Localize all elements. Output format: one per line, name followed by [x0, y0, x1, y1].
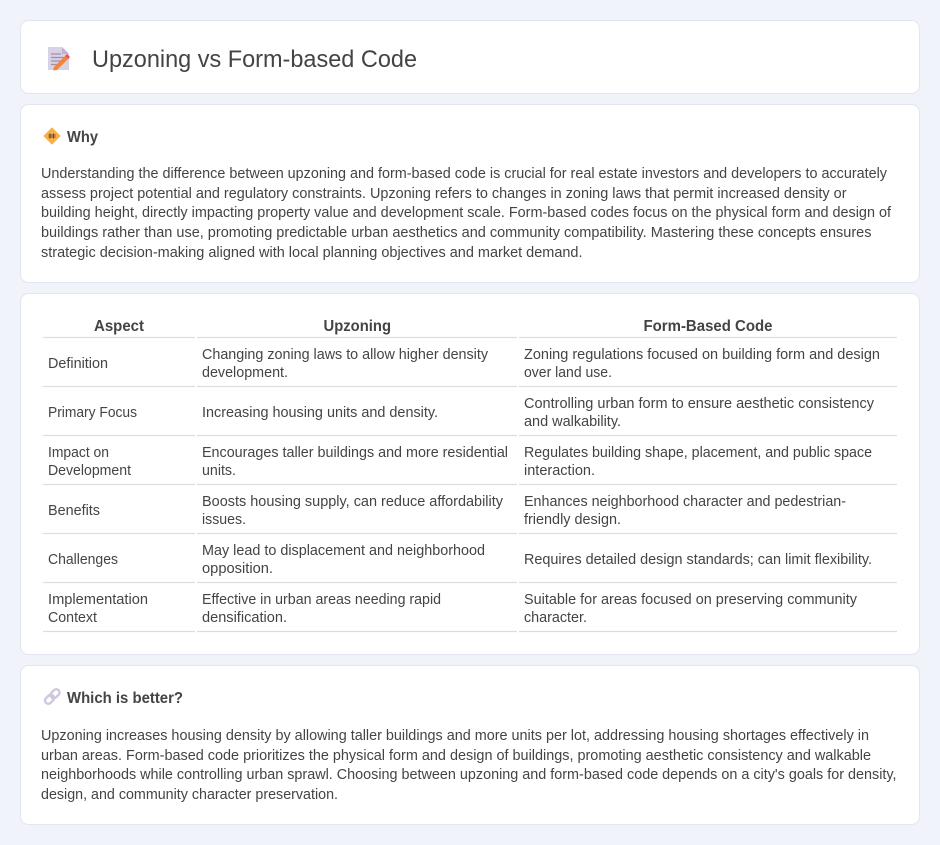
title: Upzoning vs Form-based Code	[92, 46, 417, 73]
heading: which is better: Which is better?	[67, 690, 183, 707]
row: implementation context: densification.	[202, 610, 287, 626]
row: primary focus: and walkability.	[524, 414, 621, 430]
table header row: Form-Based Code	[644, 318, 773, 335]
row: definition: over land use.	[524, 365, 612, 381]
row: challenges: Requires detailed design standards; can limit flexibility.	[524, 552, 872, 568]
text block: why paragraph	[41, 166, 892, 261]
text block: which is better paragraph: design, and community character preservation.	[41, 787, 338, 803]
text block: why paragraph: assess project potential and regulatory constraints. Upzoning refers to changes in zoning laws that permit increased density or	[41, 186, 847, 202]
row: impact on development: Encourages taller buildings and more residential	[202, 445, 508, 461]
row: challenges: May lead to displacement and neighborhood	[202, 543, 485, 559]
row: benefits: Boosts housing supply, can reduce affordability	[202, 494, 504, 510]
row: implementation context: Implementation	[48, 592, 148, 608]
text block: why paragraph: strategic decision-making aligned with local planning objectives and market demand.	[41, 245, 582, 261]
row: benefits: friendly design.	[524, 512, 621, 528]
row: benefits: Benefits	[48, 503, 100, 519]
text block: which is better paragraph	[41, 728, 896, 803]
row: implementation context: Context	[48, 610, 97, 626]
table header row: Aspect	[94, 318, 145, 335]
row: implementation context: Effective in urban areas needing rapid	[202, 592, 441, 608]
row: implementation context: character.	[524, 610, 587, 626]
row: definition: Changing zoning laws to allow higher density	[202, 347, 489, 363]
row: primary focus	[43, 396, 897, 436]
row: definition	[43, 347, 897, 386]
text block: why paragraph: Understanding the difference between upzoning and form-based code is crucial for real estate investors and developers to accurately	[41, 166, 888, 182]
row: implementation context	[43, 592, 897, 632]
icon: memo document with pencil	[48, 47, 70, 70]
icon: link chain	[44, 688, 61, 705]
row: challenges: opposition.	[202, 561, 273, 577]
panel: why	[20, 104, 920, 282]
row: definition: Zoning regulations focused on building form and design	[524, 347, 880, 363]
text block: why paragraph: building height, directly impacting property value and development scale. Form-based codes focus on the physical form and design of	[41, 205, 892, 221]
row: impact on development: Impact on	[48, 445, 109, 461]
panel: which is better	[20, 666, 920, 824]
row: impact on development: interaction.	[524, 463, 595, 479]
row: implementation context: Suitable for areas focused on preserving community	[524, 592, 858, 608]
row: primary focus: Increasing housing units and density.	[202, 405, 438, 421]
table header row	[43, 318, 897, 338]
row: impact on development: Development	[48, 463, 131, 479]
text block: which is better paragraph: neighborhoods while controlling urban sprawl. Choosing between upzoning and form-based code depends on a city's goals for density,	[41, 767, 896, 783]
panel: comparison table	[20, 294, 920, 654]
icon: orange diamond sign	[44, 128, 60, 144]
heading: why: Why	[67, 129, 98, 146]
row: definition: Definition	[48, 356, 108, 372]
row: challenges	[43, 543, 897, 582]
table header row: Upzoning	[324, 318, 391, 335]
text block: which is better paragraph: Upzoning increases housing density by allowing taller buildings and more units per lot, addressing housing shortages effectively in	[41, 728, 869, 744]
text block: why paragraph: buildings rather than use, promoting predictable urban aesthetics and community compatibility. Mastering these concepts ensures	[41, 225, 871, 241]
row: benefits: Enhances neighborhood character and pedestrian-	[524, 494, 846, 510]
row: primary focus: Primary Focus	[48, 405, 137, 421]
row: benefits	[43, 494, 897, 534]
text block: which is better paragraph: urban areas. Form-based code prioritizes the physical form and design of buildings, promoting aesthetic consistency and walkable	[41, 748, 871, 764]
row: challenges: Challenges	[48, 552, 118, 568]
row: definition: development.	[202, 365, 288, 381]
row: benefits: issues.	[202, 512, 246, 528]
row: impact on development: units.	[202, 463, 236, 479]
row: impact on development: Regulates building shape, placement, and public space	[524, 445, 872, 461]
panel: title header	[20, 20, 920, 94]
row: impact on development	[43, 445, 897, 484]
row: primary focus: Controlling urban form to ensure aesthetic consistency	[524, 396, 875, 412]
